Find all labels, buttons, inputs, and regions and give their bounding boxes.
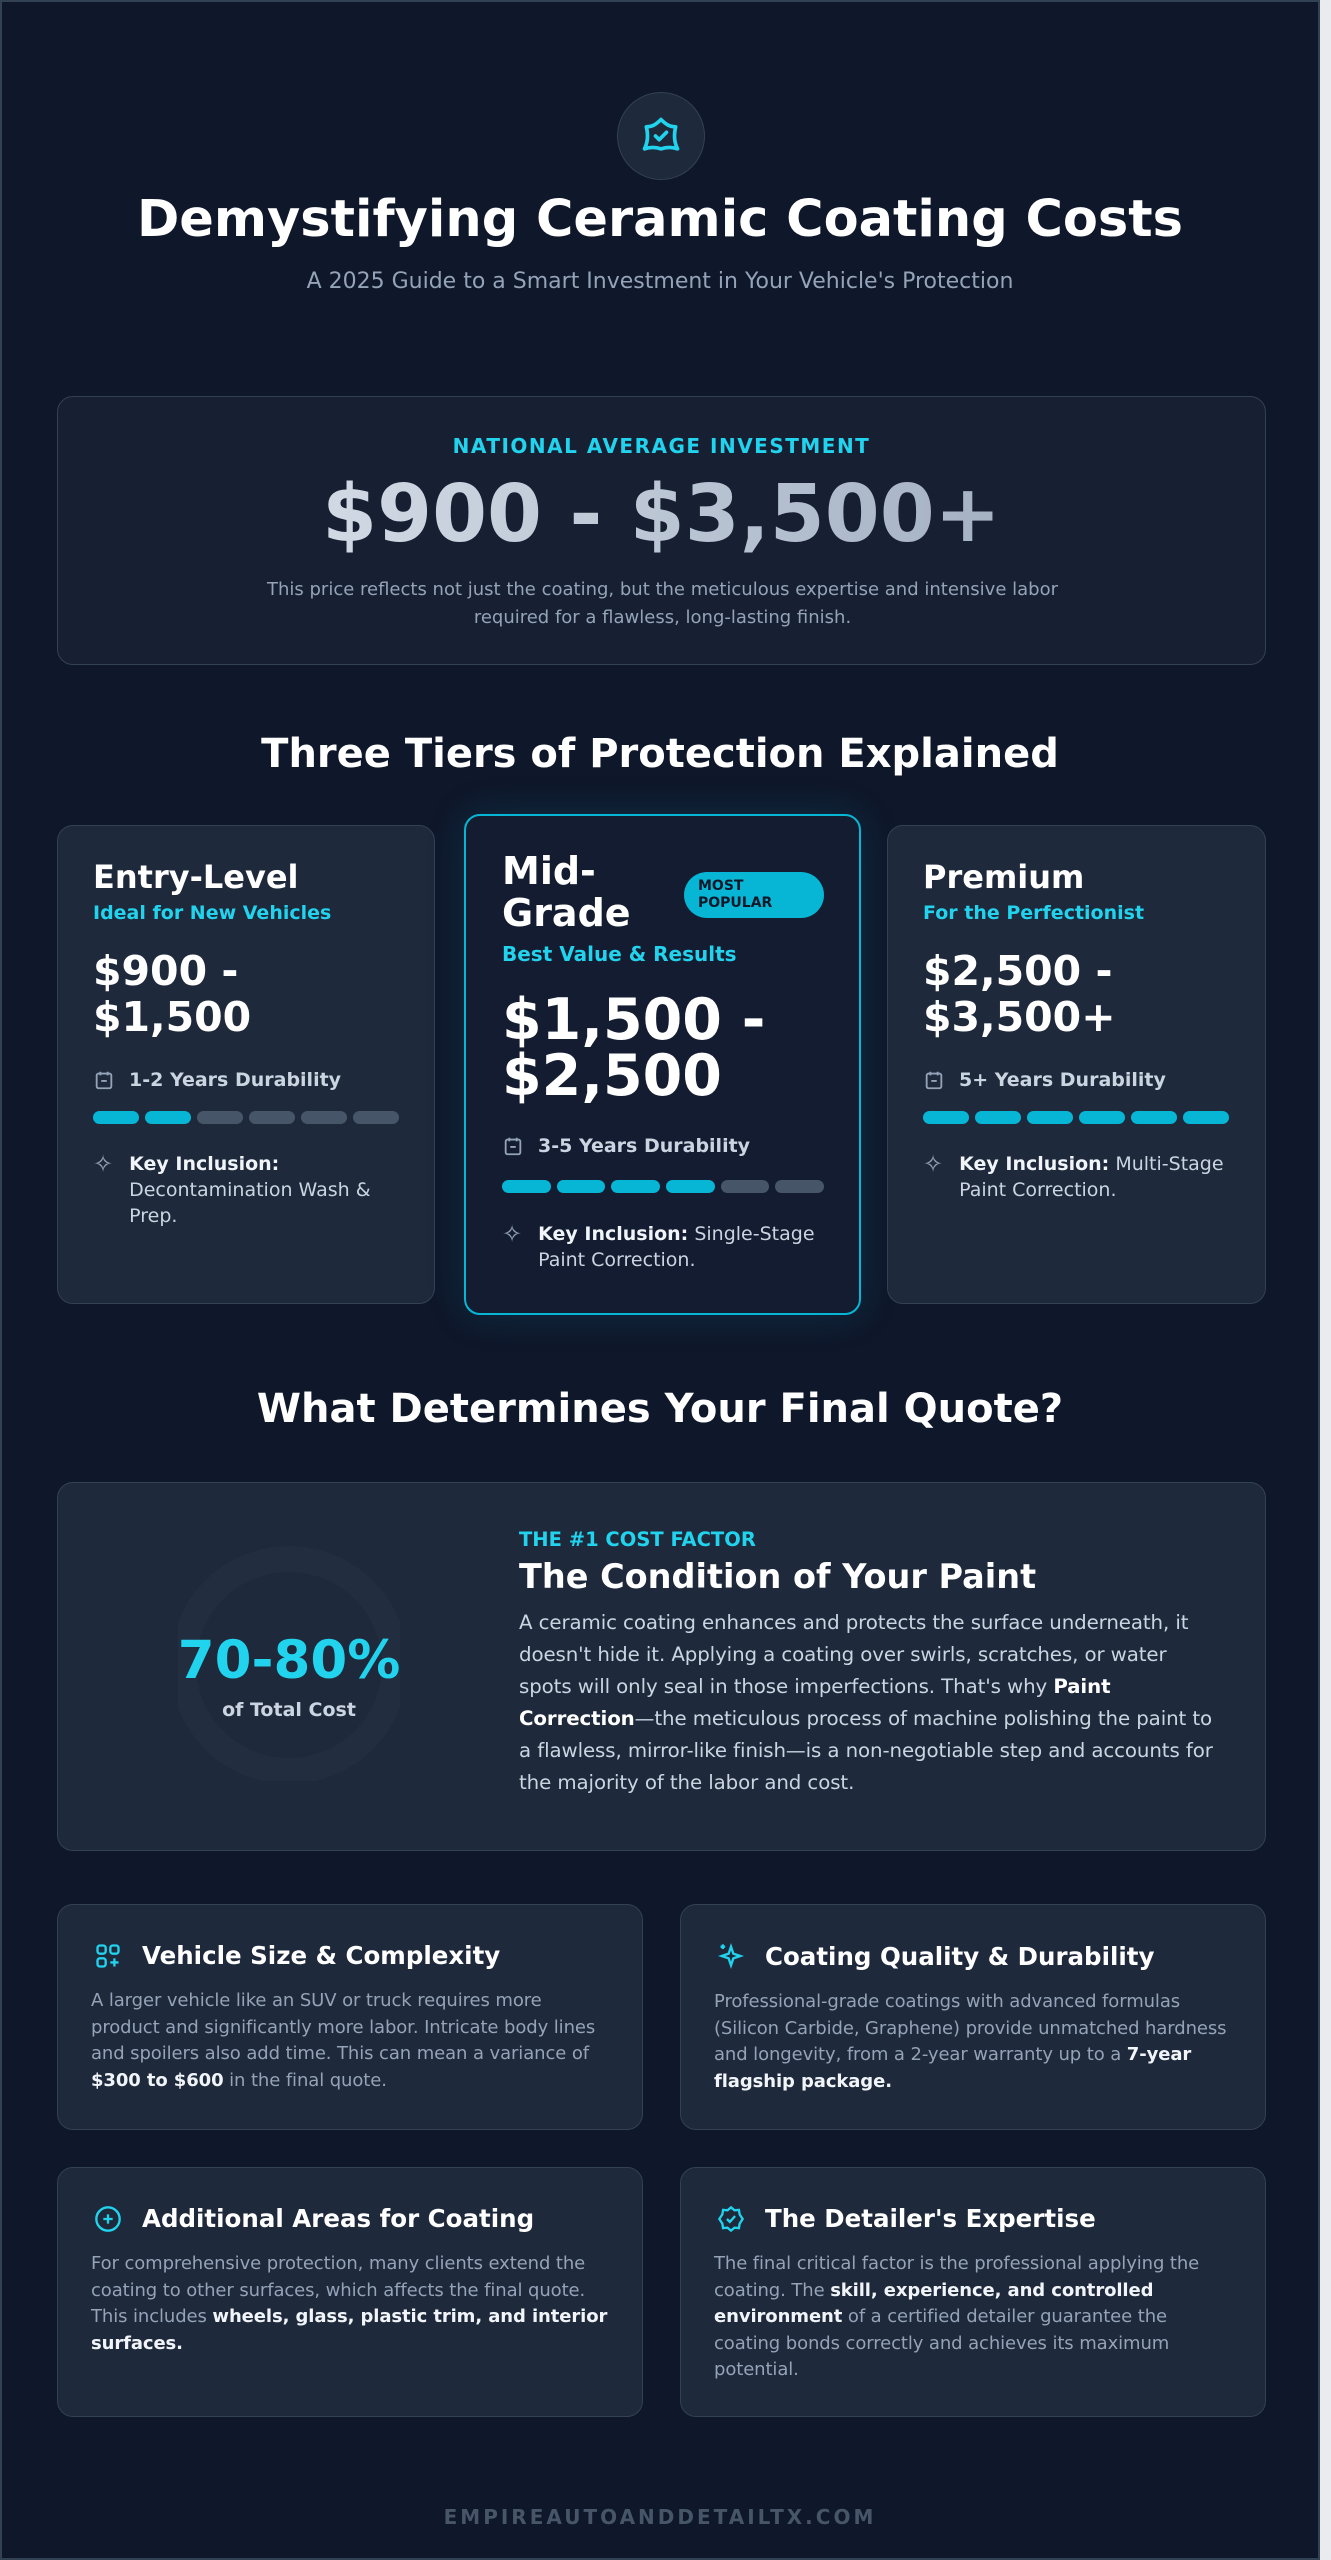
- durability: 5+ Years Durability: [959, 1069, 1166, 1091]
- price: [923, 947, 1116, 1041]
- icon: shield badge: [617, 92, 705, 180]
- tier title: Premium: [923, 858, 1084, 896]
- panel: additional areas: [57, 2167, 643, 2417]
- tier subtitle: Best Value & Results: [502, 942, 737, 966]
- panel: coating quality: flagship package.: [714, 2071, 892, 2092]
- text block: Correction—the meticulous process of machine polishing the paint to: [519, 1707, 1212, 1730]
- panel: vehicle size: Vehicle Size & Complexity: [142, 1941, 500, 1970]
- price: [93, 947, 251, 1041]
- heading: final quote: What Determines Your Final Quote?: [257, 1386, 1063, 1432]
- panel: detailer expertise: coating. The skill, experience, and controlled: [714, 2280, 1153, 2301]
- panel: additional areas: coating to other surfaces, which affects the final quote.: [91, 2280, 585, 2301]
- price: $3,500+: [923, 993, 1116, 1041]
- panel: detailer expertise: environment of a certified detailer guarantee the: [714, 2306, 1167, 2327]
- text block: [519, 1528, 1213, 1794]
- title: Demystifying Ceramic Coating Costs: [137, 190, 1183, 249]
- panel: national average: [57, 396, 1266, 665]
- text block: A ceramic coating enhances and protects the surface underneath, it: [519, 1611, 1188, 1634]
- tier subtitle: For the Perfectionist: [923, 902, 1144, 924]
- panel: vehicle size: and spoilers also add time. This can mean a variance of: [91, 2043, 589, 2064]
- stat: 70-80%: [178, 1630, 400, 1691]
- panel: detailer expertise: coating bonds correctly and achieves its maximum: [714, 2333, 1169, 2354]
- tier title: Mid-: [502, 849, 596, 893]
- panel: premium: [887, 825, 1266, 1304]
- panel: detailer expertise: The Detailer's Expertise: [765, 2204, 1096, 2233]
- badge: POPULAR: [698, 895, 772, 911]
- text block: spots will only seal in those imperfections. That's why Paint: [519, 1675, 1110, 1698]
- big price: [58, 468, 1265, 560]
- panel: detailer expertise: potential.: [714, 2359, 799, 2380]
- panel: detailer expertise: The final critical factor is the professional applying the: [714, 2253, 1199, 2274]
- price: $1,500 -: [502, 987, 765, 1053]
- tier title: Grade: [502, 891, 631, 935]
- panel: additional areas: For comprehensive protection, many clients extend the: [91, 2253, 585, 2274]
- footer: EMPIREAUTOANDDETAILTX.COM: [444, 2505, 876, 2529]
- heading: three tiers: Three Tiers of Protection Explained: [261, 731, 1059, 777]
- durability: 3-5 Years Durability: [538, 1135, 750, 1157]
- big price: $900 - $3,500+: [322, 468, 1001, 560]
- panel: vehicle size: $300 to $600 in the final quote.: [91, 2070, 387, 2091]
- key inclusion: ✧: [923, 1150, 943, 1178]
- panel: vehicle size: [57, 1904, 643, 2130]
- price: $2,500: [502, 1043, 722, 1109]
- key inclusion: Key Inclusion: Multi-Stage Paint Correction.: [959, 1153, 1224, 1201]
- key inclusion: [93, 1150, 371, 1227]
- tier subtitle: Ideal for New Vehicles: [93, 902, 331, 924]
- panel: coating quality: (Silicon Carbide, Graphene) provide unmatched hardness: [714, 2018, 1226, 2039]
- label: NATIONAL AVERAGE INVESTMENT: [453, 434, 870, 458]
- durability bars: [93, 1111, 399, 1124]
- panel: vehicle size: A larger vehicle like an SUV or truck requires more: [91, 1990, 542, 2011]
- durability: 1-2 Years Durability: [129, 1069, 341, 1091]
- text block: the majority of the labor and cost.: [519, 1771, 854, 1794]
- panel: additional areas: surfaces.: [91, 2333, 183, 2354]
- price: [502, 987, 765, 1109]
- donut chart: [178, 1630, 400, 1721]
- badge: [684, 872, 824, 918]
- price: $1,500: [93, 993, 251, 1041]
- key inclusion: ✧: [502, 1220, 522, 1248]
- tier title: Entry-Level: [93, 858, 298, 896]
- panel: coating quality: and longevity, from a 2-year warranty up to a 7-year: [714, 2044, 1191, 2065]
- text block: doesn't hide it. Applying a coating over swirls, scratches, or water: [519, 1643, 1167, 1666]
- panel: coating quality: [680, 1904, 1266, 2130]
- tier title: [502, 849, 631, 935]
- text block: a flawless, mirror-like finish—is a non-negotiable step and accounts for: [519, 1739, 1213, 1762]
- subtitle: A 2025 Guide to a Smart Investment in Your Vehicle's Protection: [307, 269, 1013, 294]
- text block: The Condition of Your Paint: [519, 1557, 1036, 1596]
- stat caption: of Total Cost: [222, 1699, 356, 1721]
- panel: additional areas: This includes wheels, glass, plastic trim, and interior: [91, 2306, 607, 2327]
- panel: entry-level: [57, 825, 435, 1304]
- panel: coating quality: Coating Quality & Durability: [765, 1942, 1154, 1970]
- panel: additional areas: Additional Areas for Coating: [142, 2204, 534, 2233]
- price: $2,500 -: [923, 947, 1113, 995]
- panel: mid-grade: [464, 814, 861, 1315]
- panel: paint condition: [57, 1482, 1266, 1851]
- panel: coating quality: Professional-grade coatings with advanced formulas: [714, 1991, 1180, 2012]
- key inclusion: Decontamination Wash & Prep.: [129, 1179, 371, 1227]
- key inclusion: Key Inclusion: Single-Stage Paint Correction.: [538, 1223, 815, 1271]
- durability bars: [502, 1180, 824, 1193]
- badge: MOST: [698, 878, 743, 894]
- panel: vehicle size: product and significantly more labor. Intricate body lines: [91, 2017, 595, 2038]
- panel: detailer expertise: [680, 2167, 1266, 2417]
- durability bars: [923, 1111, 1229, 1124]
- text block: THE #1 COST FACTOR: [519, 1528, 756, 1551]
- description: This price reflects not just the coating, but the meticulous expertise and intensive labor required for a flawless, long-lasting finish.: [267, 579, 1058, 628]
- key inclusion: Key Inclusion:: [129, 1153, 279, 1175]
- key inclusion: ✧: [93, 1150, 113, 1178]
- price: $900 -: [93, 947, 238, 995]
